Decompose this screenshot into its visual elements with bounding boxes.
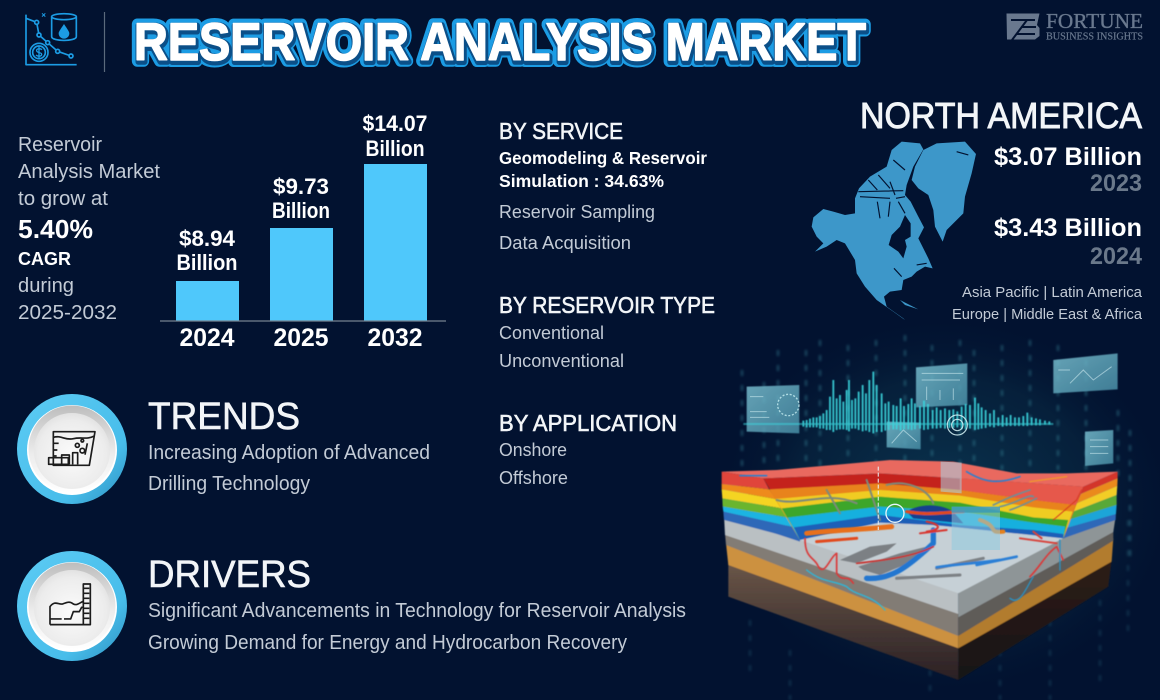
drivers text block: Growing Demand for Energy and Hydrocarbon Recovery [148, 632, 627, 654]
title: RESERVOIR ANALYSIS MARKET [135, 15, 867, 74]
logo: Fortune Business Insights: BUSINESS INSIGHTS [1046, 32, 1143, 42]
drivers text block [148, 554, 686, 654]
segment: by reservoir type: Conventional [499, 322, 604, 343]
segment: by service: Data Acquisition [499, 232, 631, 253]
North America stats: 2024 [1090, 243, 1143, 270]
segment: by service: Geomodeling & Reservoir [499, 148, 707, 168]
glass overlays on the block [878, 462, 1000, 550]
icon: reservoir analysis [26, 13, 77, 65]
segment: by application: Onshore [499, 439, 567, 460]
map: North America [812, 142, 976, 320]
bar chart: market size: 2025 [274, 324, 329, 352]
bar chart: market size: Billion [272, 198, 330, 223]
geology details: rivers and seams [740, 472, 1082, 610]
segment: by application: Offshore [499, 467, 568, 488]
CAGR text block: Reservoir [18, 134, 102, 156]
bar chart: market size: 2032 [368, 324, 422, 352]
North America stats: NORTH AMERICA [860, 95, 1142, 136]
bar chart: market size: 2024 [180, 324, 235, 352]
logo: Fortune Business Insights: FORTUNE [1046, 9, 1143, 33]
segment: by service: Reservoir Sampling [499, 201, 655, 222]
segment: by reservoir type [499, 292, 715, 371]
segment: by application [499, 410, 677, 488]
CAGR text block: 5.40% [18, 214, 93, 244]
logo: Fortune Business Insights [1006, 9, 1143, 42]
CAGR text block: CAGR [18, 249, 71, 269]
North America stats: $3.07 Billion [994, 143, 1142, 171]
trends text block: TRENDS [148, 396, 300, 438]
CAGR text block: during [18, 275, 74, 297]
segment: by service: BY SERVICE [499, 118, 623, 144]
segment: by reservoir type: Unconventional [499, 350, 624, 371]
bar chart: market size: $14.07 [362, 111, 428, 136]
icon: trends badge [17, 394, 127, 504]
drivers text block: Significant Advancements in Technology for Reservoir Analysis [148, 600, 686, 622]
trends text block: Drilling Technology [148, 473, 310, 495]
bar chart: market size: Billion [176, 250, 238, 275]
bar chart: market size: Billion [366, 136, 424, 161]
soil layers and rainbow strata [722, 460, 1118, 680]
North America stats: $3.43 Billion [994, 214, 1142, 242]
segment: by service: Simulation : 34.63% [499, 171, 664, 191]
segment: by service [499, 118, 707, 253]
North America stats: Asia Pacific | Latin America [962, 285, 1143, 301]
CAGR text block [18, 134, 160, 324]
illustration: holographic data panels and waveform [743, 353, 1118, 466]
illustration: reservoir geological cross-section [722, 460, 1118, 680]
bar chart: market size [160, 111, 446, 352]
CAGR text block: to grow at [18, 188, 108, 210]
North America stats: Europe | Middle East & Africa [952, 307, 1143, 323]
icon: drivers badge [17, 551, 127, 661]
CAGR text block: Analysis Market [18, 161, 160, 183]
segment: by application: BY APPLICATION [499, 410, 677, 436]
CAGR text block: 2025-2032 [18, 302, 117, 324]
drivers text block: DRIVERS [148, 554, 311, 596]
title: RESERVOIR ANALYSIS MARKET [134, 14, 866, 73]
trends text block: Increasing Adoption of Advanced [148, 442, 430, 464]
title: RESERVOIR ANALYSIS MARKET [134, 13, 866, 72]
North America stats [860, 95, 1143, 323]
bar chart: market size: $9.73 [273, 174, 329, 199]
trends text block [148, 396, 430, 495]
bar chart: market size: $8.94 [179, 226, 236, 251]
North America stats: 2023 [1090, 170, 1142, 197]
segment: by reservoir type: BY RESERVOIR TYPE [499, 292, 715, 318]
